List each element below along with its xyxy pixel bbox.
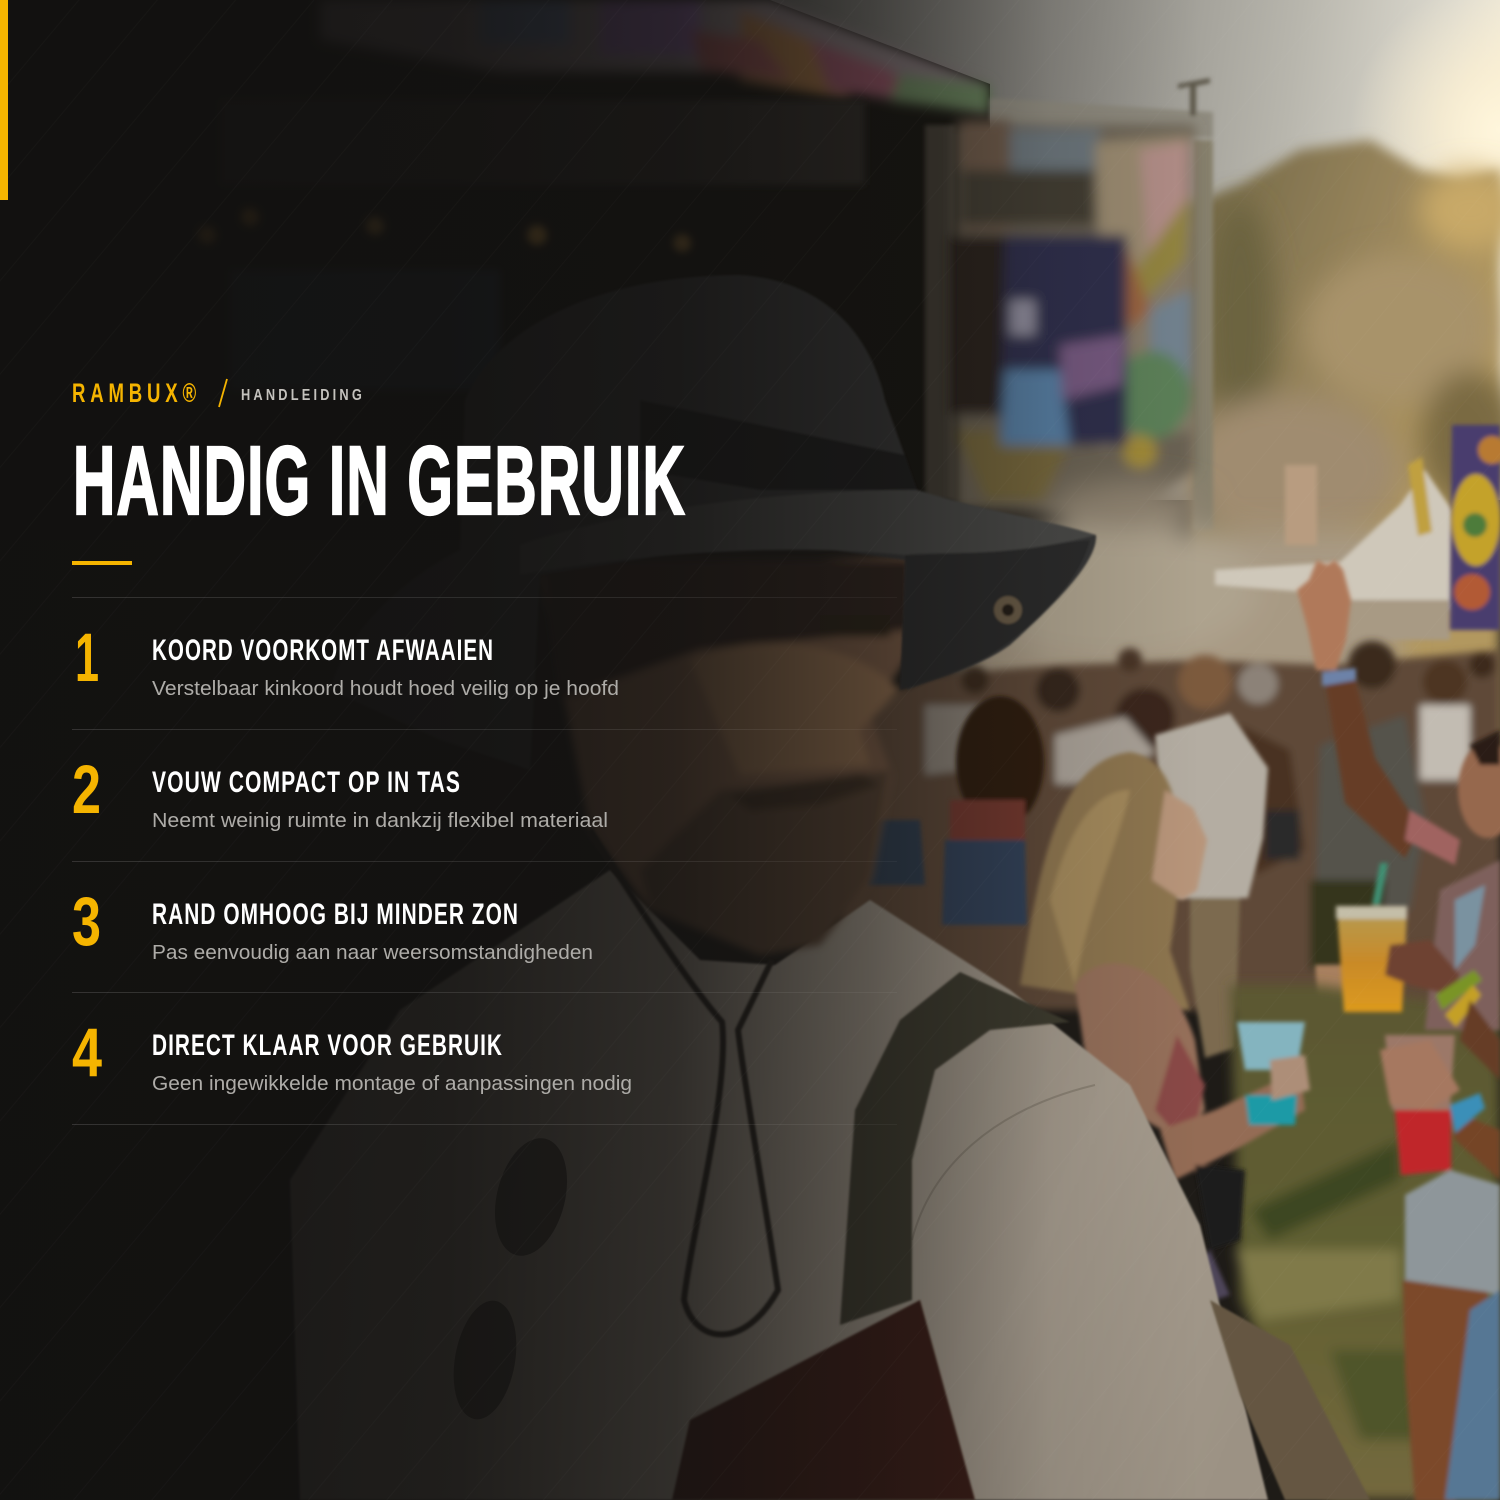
description 2: Neemt weinig ruimte in dankzij flexibel materiaal: [152, 810, 608, 832]
number 3: 3: [72, 883, 101, 960]
man: hat: [330, 275, 1096, 770]
man: backpack strap: [840, 972, 1070, 1325]
man: satchel: [1210, 1300, 1370, 1500]
description 3: Pas eenvoudig aan naar weersomstandigheden: [152, 942, 593, 964]
eyebrow: [72, 378, 365, 408]
slash: [219, 379, 227, 407]
brand name: RAMBUX®: [72, 378, 201, 408]
white tent: [1215, 457, 1452, 640]
feature 1: [75, 619, 619, 700]
feature 4: [72, 1014, 632, 1095]
number 2: 2: [72, 751, 101, 828]
heading 4: DIRECT KLAAR VOOR GEBRUIK: [152, 1029, 503, 1062]
stage interior faint lights and figure glow: [198, 100, 865, 390]
colourful stage banner: [320, 0, 990, 115]
title: HANDIG IN GEBRUIK: [73, 426, 686, 535]
sky: [700, 0, 1500, 500]
dark stage: [0, 0, 990, 540]
man: shirt: [290, 870, 1268, 1500]
number 1: 1: [75, 619, 99, 696]
woman with raised arm, drinks and colourful shirt: [1297, 560, 1500, 1500]
accent bar: [0, 0, 8, 200]
heading 1: KOORD VOORKOMT AFWAAIEN: [152, 634, 494, 667]
distant crowd: [840, 641, 1500, 1010]
description 4: Geen ingewikkelde montage of aanpassingen nodig: [152, 1073, 632, 1095]
man: shirt sleeve seam: [912, 1085, 1095, 1240]
stage screen and painted panels: [950, 120, 1195, 520]
truss tower: [925, 78, 1213, 530]
man: notebook: [672, 1300, 975, 1500]
feature 2: [72, 751, 608, 832]
colourful flag banner: [1450, 425, 1500, 630]
section label: HANDLEIDING: [241, 387, 365, 404]
woman with blonde hair and blue cup: [1020, 752, 1310, 1300]
man: hat cord: [590, 830, 778, 1334]
description 1: Verstelbaar kinkoord houdt hoed veilig op je hoofd: [152, 678, 619, 700]
number 4: 4: [72, 1014, 102, 1091]
smoke cloud in front of stage: [960, 481, 1400, 720]
heading 3: RAND OMHOOG BIJ MINDER ZON: [152, 898, 519, 931]
trees and dust cloud: [1180, 140, 1500, 760]
man: sunglasses hanging on shirt: [445, 1131, 579, 1424]
man: neck and face: [540, 555, 918, 955]
grass: [1230, 985, 1500, 1500]
heading 2: VOUW COMPACT OP IN TAS: [152, 766, 461, 799]
title underline: [72, 561, 132, 565]
feature 3: [72, 883, 593, 964]
